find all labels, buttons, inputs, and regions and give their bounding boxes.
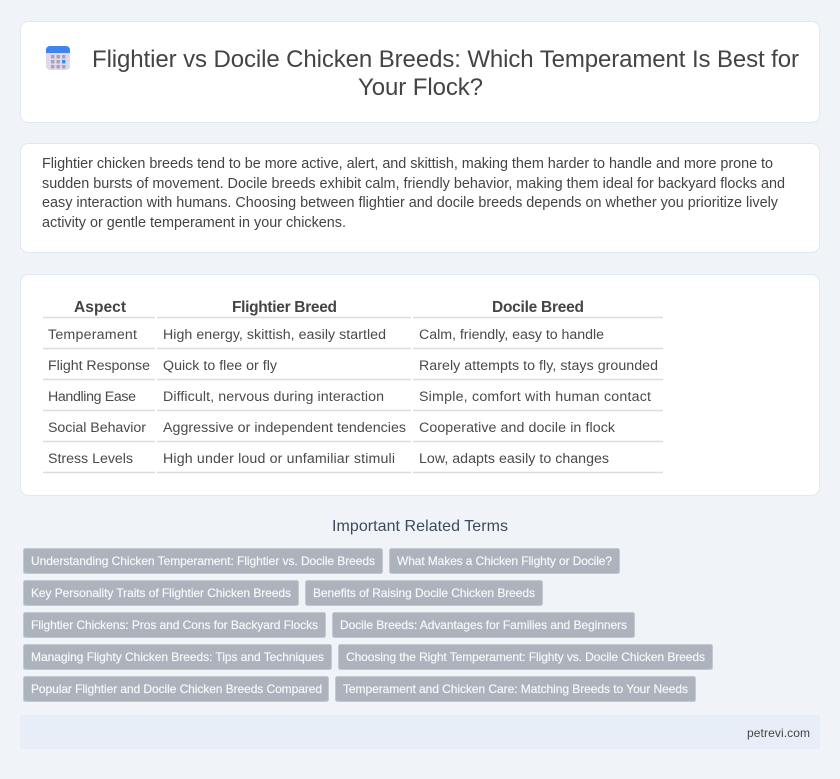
row: stress levels: High under loud or unfamiliar stimuli bbox=[163, 451, 395, 467]
panel: intro paragraph bbox=[20, 144, 820, 252]
row: handling ease: Handling Ease bbox=[48, 389, 136, 405]
related term tags: What Makes a Chicken Flighty or Docile? bbox=[397, 554, 612, 568]
panel: intro paragraph: activity or gentle temperament in your chickens. bbox=[42, 215, 346, 231]
related term tags: Flightier Chickens: Pros and Cons for Backyard Flocks bbox=[31, 618, 318, 632]
row: handling ease: Simple, comfort with human contact bbox=[419, 389, 651, 405]
row: stress levels: Low, adapts easily to changes bbox=[419, 451, 609, 467]
related term tags: Key Personality Traits of Flightier Chicken Breeds bbox=[31, 586, 291, 600]
related term tags: Understanding Chicken Temperament: Flightier vs. Docile Breeds bbox=[31, 554, 375, 568]
footer bbox=[20, 715, 820, 749]
icon: calendar bbox=[46, 46, 70, 70]
row: temperament: Calm, friendly, easy to handle bbox=[419, 327, 604, 343]
row: stress levels bbox=[48, 451, 609, 467]
title: Your Flock? bbox=[358, 74, 483, 101]
row: flight response: Flight Response bbox=[48, 358, 150, 374]
panel: intro paragraph: easy interaction with humans. Choosing between flightier and docile breeds depends on whether you prioritize lively bbox=[42, 195, 779, 211]
row: social behavior: Social Behavior bbox=[48, 420, 146, 436]
table header: Flightier Breed bbox=[232, 299, 337, 316]
related term tags: Managing Flighty Chicken Breeds: Tips and Techniques bbox=[31, 650, 324, 664]
related term tags bbox=[24, 548, 712, 702]
row: temperament: High energy, skittish, easily startled bbox=[163, 327, 386, 343]
row: flight response: Rarely attempts to fly, stays grounded bbox=[419, 358, 658, 374]
related term tags: Popular Flightier and Docile Chicken Breeds Compared bbox=[31, 682, 322, 696]
related term tags: Benefits of Raising Docile Chicken Breeds bbox=[313, 586, 535, 600]
panel: title card bbox=[20, 22, 820, 122]
related term tags: Choosing the Right Temperament: Flighty vs. Docile Chicken Breeds bbox=[346, 650, 705, 664]
panel: intro paragraph: sudden bursts of movement. Docile breeds exhibit calm, friendly behavior, making them ideal for backyard flocks and bbox=[42, 176, 785, 192]
row: temperament bbox=[48, 327, 604, 343]
row: social behavior bbox=[48, 420, 616, 436]
row: flight response bbox=[48, 358, 658, 374]
related term tags: Docile Breeds: Advantages for Families and Beginners bbox=[340, 618, 627, 632]
row: flight response: Quick to flee or fly bbox=[163, 358, 278, 374]
related term tags: Temperament and Chicken Care: Matching Breeds to Your Needs bbox=[343, 682, 688, 696]
row: handling ease bbox=[48, 389, 651, 405]
heading: related terms: Important Related Terms bbox=[332, 518, 508, 535]
table header: Docile Breed bbox=[492, 299, 584, 316]
title bbox=[92, 46, 799, 101]
row: handling ease: Difficult, nervous during interaction bbox=[163, 389, 384, 405]
row: social behavior: Cooperative and docile in flock bbox=[419, 420, 616, 436]
footer: petrevi.com bbox=[747, 726, 810, 740]
title: Flightier vs Docile Chicken Breeds: Which Temperament Is Best for bbox=[92, 46, 799, 73]
table header bbox=[74, 299, 584, 316]
row: social behavior: Aggressive or independent tendencies bbox=[163, 420, 406, 436]
row: stress levels: Stress Levels bbox=[48, 451, 133, 467]
panel: comparison table bbox=[20, 274, 820, 496]
row: temperament: Temperament bbox=[48, 327, 137, 343]
panel: intro paragraph: Flightier chicken breeds tend to be more active, alert, and skittish, making them harder to handle and more prone to bbox=[42, 156, 773, 172]
table header: Aspect bbox=[74, 299, 126, 316]
